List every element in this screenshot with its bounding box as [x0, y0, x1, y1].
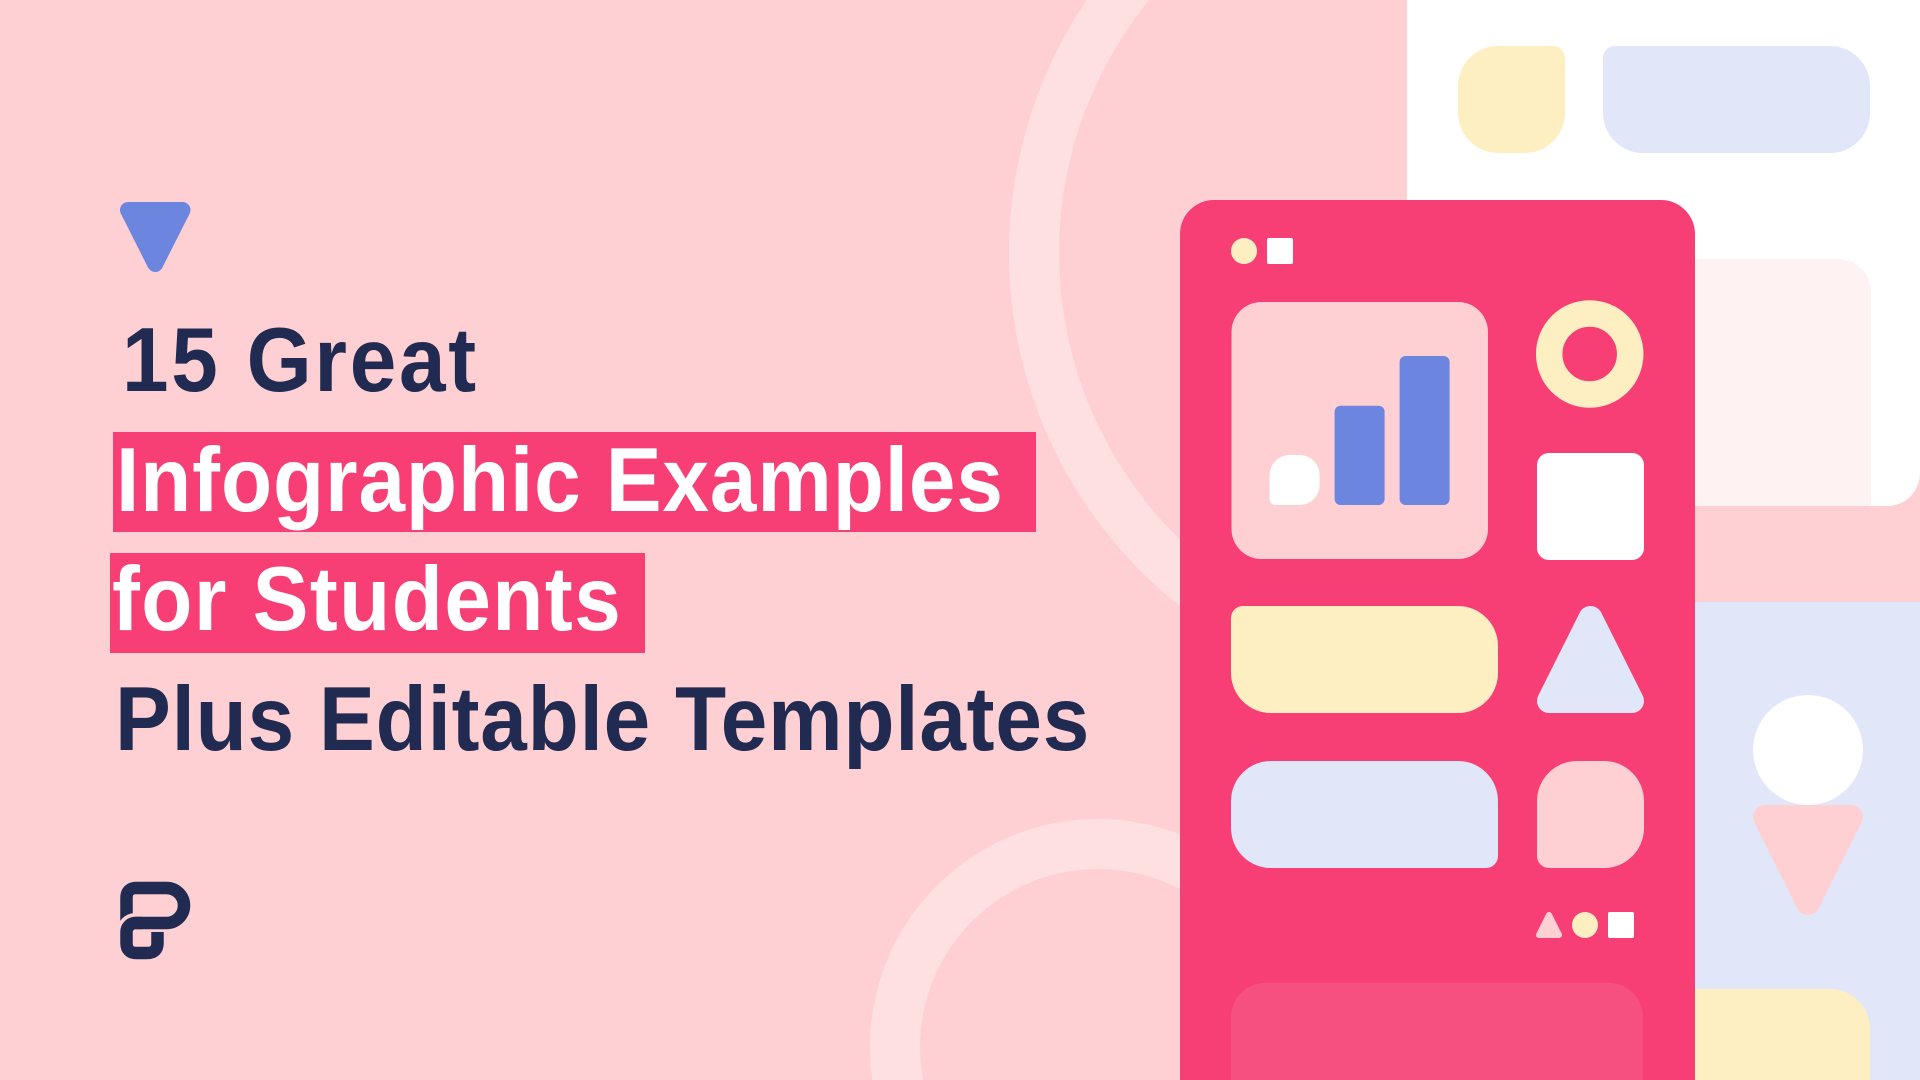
icon: brand logo	[126, 888, 184, 953]
shape: yellow rounded bar	[1231, 606, 1498, 713]
chart bar: medium blue bar	[1335, 406, 1385, 505]
shape: lavender rounded bar	[1231, 761, 1498, 868]
shape: white circle right	[1753, 695, 1863, 805]
shape: pink inverted triangle right	[1765, 817, 1851, 903]
icon: yellow ring	[1549, 314, 1630, 394]
shape: faded bottom tile	[1231, 983, 1643, 1080]
chart: bar chart tile	[1232, 302, 1488, 559]
panel: pale pink card behind	[1600, 259, 1871, 506]
icon: blue inverted triangle	[128, 210, 182, 264]
heading: 15 Great: 15 Great	[122, 309, 476, 411]
shape: top yellow block	[1458, 46, 1565, 153]
icon: card header square	[1267, 238, 1293, 264]
shape: pink rounded block	[1537, 761, 1644, 868]
icon: small pink triangle	[1539, 915, 1559, 935]
panel: white backdrop	[1407, 0, 1920, 506]
highlight: infographic examples: Infographic Examples	[116, 429, 1003, 531]
heading: Plus Editable Templates: Plus Editable Templates	[115, 668, 1089, 770]
shape: white square	[1537, 453, 1644, 560]
panel: pink dashboard card	[1180, 200, 1695, 1080]
highlight: for students: for Students	[112, 548, 621, 650]
shape: lavender triangle	[1549, 618, 1632, 701]
shape: top lavender block	[1603, 46, 1870, 153]
panel: lavender backdrop	[1600, 602, 1920, 1080]
icon: card header circle	[1231, 238, 1257, 264]
icon: small yellow circle	[1572, 912, 1598, 938]
shape: bottom yellow block	[1600, 989, 1870, 1080]
chart bar: tall blue bar	[1400, 356, 1450, 505]
icon: small white square	[1608, 912, 1634, 938]
chart bar: white short bar	[1270, 455, 1320, 505]
